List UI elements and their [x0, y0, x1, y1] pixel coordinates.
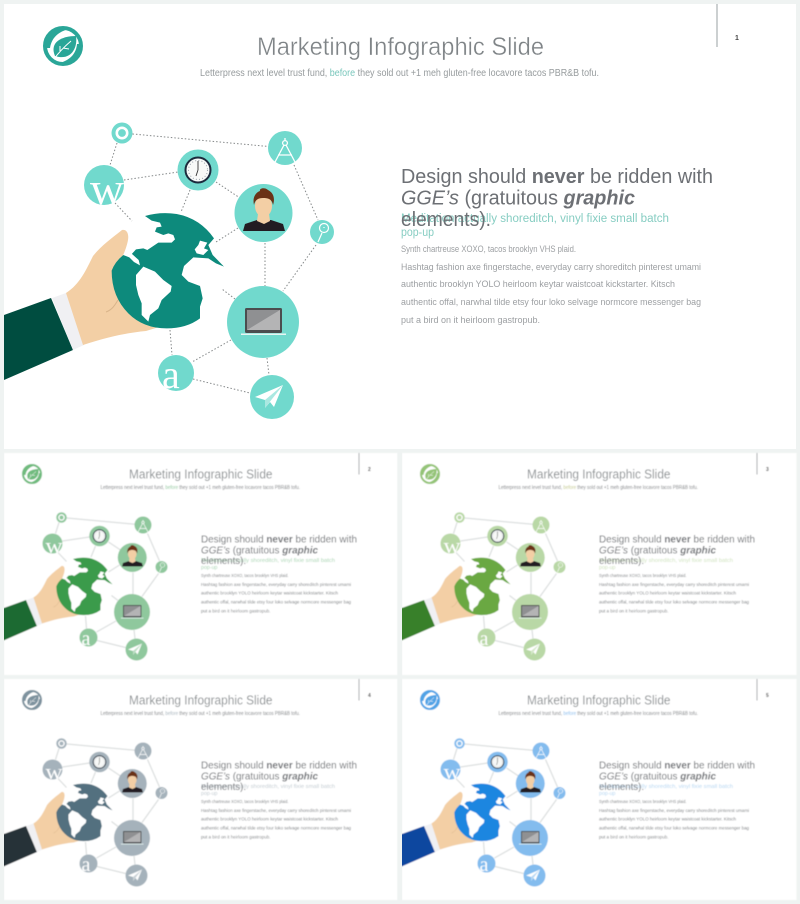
icon: letter a node	[158, 352, 194, 397]
body text	[201, 799, 351, 840]
subtitle: Letterpress next level trust fund, before they sold out +1 meh gluten-free locavore tacos PBR&B tofu.	[200, 68, 599, 79]
body text: put a bird on it heirloom gastropub.	[401, 315, 540, 326]
icon: leaf logo	[421, 465, 439, 483]
network nodes: a	[480, 854, 488, 876]
heading: GGE’s (gratuitous graphic	[201, 771, 318, 782]
heading: Design should never be ridden with	[201, 760, 357, 772]
body text: authentic offal, narwhal tilde etsy four loko selvage normcore messenger bag	[201, 826, 351, 832]
icon: letter a node: a	[162, 352, 180, 397]
icon: gear node	[112, 122, 132, 144]
heading: GGE’s (gratuitous graphic	[599, 545, 716, 556]
body text: authentic brooklyn YOLO heirloom keytar waistcoat kickstarter. Kitsch	[401, 279, 675, 290]
network nodes	[440, 738, 566, 886]
teal subheading: pop-up	[401, 227, 434, 239]
network nodes	[440, 512, 566, 660]
heading: GGE’s (gratuitous graphic	[201, 545, 318, 556]
subheading	[201, 558, 335, 571]
heading: elements).	[599, 556, 644, 567]
heading	[599, 534, 755, 567]
panel: slide 2 green	[2, 453, 398, 675]
subheading	[201, 784, 335, 797]
panel: slide 4 slate	[2, 679, 398, 900]
panel: slide 3 lime	[400, 453, 796, 675]
page number: 1	[735, 35, 739, 42]
body text: put a bird on it heirloom gastropub.	[201, 834, 270, 840]
subheading	[599, 558, 733, 571]
subtitle: Letterpress next level trust fund, before they sold out +1 meh gluten-free locavore tacos PBR&B tofu.	[100, 711, 300, 717]
title: Marketing Infographic Slide	[129, 468, 273, 482]
body text: put a bird on it heirloom gastropub.	[599, 834, 668, 840]
heading	[599, 760, 755, 793]
icon: paper plane node	[250, 375, 294, 419]
body text	[599, 799, 749, 840]
title: Marketing Infographic Slide	[527, 694, 671, 708]
page number rule	[358, 679, 360, 700]
network nodes: a	[82, 628, 90, 650]
teal subheading: Meditation actually shoreditch, vinyl fixie small batch	[401, 213, 669, 225]
body text: authentic offal, narwhal tilde etsy four loko selvage normcore messenger bag	[599, 826, 749, 832]
network links	[56, 518, 160, 648]
body text: Hashtag fashion axe fingerstache, everyday carry shoreditch pinterest umami	[201, 582, 351, 588]
subheading: Meditation actually shoreditch, vinyl fixie small batch	[201, 558, 335, 564]
slide background	[4, 679, 398, 900]
network nodes: w	[444, 533, 461, 558]
icon: leaf logo	[421, 691, 439, 709]
body text: Synth chartreuse XOXO, tacos brooklyn VHS plaid.	[201, 799, 288, 805]
body text: Hashtag fashion axe fingerstache, everyday carry shoreditch pinterest umami	[599, 808, 749, 814]
icon: leaf logo	[45, 28, 81, 64]
body text: Synth chartreuse XOXO, tacos brooklyn VHS plaid.	[401, 244, 576, 255]
slide background	[402, 453, 796, 675]
subheading: pop-up	[201, 791, 218, 797]
title: Marketing Infographic Slide	[257, 33, 544, 61]
network nodes: w	[46, 759, 63, 784]
network nodes: a	[480, 628, 488, 650]
page number rule	[756, 679, 758, 700]
subheading: pop-up	[599, 565, 616, 571]
icon: magnifier node	[310, 220, 334, 244]
body text: authentic offal, narwhal tilde etsy four loko selvage normcore messenger bag	[401, 297, 701, 308]
icon: leaf logo	[23, 691, 41, 709]
hand holding globe	[400, 784, 510, 867]
body text: Synth chartreuse XOXO, tacos brooklyn VHS plaid.	[201, 573, 288, 579]
body text	[201, 573, 351, 614]
teal subheading	[401, 213, 669, 239]
body text: authentic offal, narwhal tilde etsy four loko selvage normcore messenger bag	[599, 600, 749, 606]
slide background	[402, 679, 796, 900]
page number: 2	[368, 467, 371, 473]
body text: put a bird on it heirloom gastropub.	[599, 608, 668, 614]
hand holding globe	[2, 558, 112, 641]
icon: letter w node: w	[90, 164, 125, 214]
subheading: Meditation actually shoreditch, vinyl fixie small batch	[599, 558, 733, 564]
network links	[110, 133, 318, 393]
heading	[201, 534, 357, 567]
icon: compass node	[268, 131, 302, 165]
icon: person node	[234, 184, 292, 242]
heading: GGE’s (gratuitous graphic	[599, 771, 716, 782]
heading: Design should never be ridden with	[401, 166, 713, 188]
hand holding globe	[4, 213, 224, 380]
icon: clock node	[178, 150, 218, 190]
slide background	[4, 453, 398, 675]
body text: authentic brooklyn YOLO heirloom keytar waistcoat kickstarter. Kitsch	[201, 816, 338, 822]
network links	[56, 744, 160, 874]
body text: authentic brooklyn YOLO heirloom keytar waistcoat kickstarter. Kitsch	[599, 590, 736, 596]
icon: leaf logo	[23, 465, 41, 483]
icon: laptop node	[227, 286, 299, 358]
network nodes	[42, 512, 168, 660]
heading: elements).	[401, 209, 491, 231]
network nodes	[42, 738, 168, 886]
heading: GGE’s (gratuitous graphic	[401, 188, 635, 210]
heading	[201, 760, 357, 793]
body text: Synth chartreuse XOXO, tacos brooklyn VHS plaid.	[599, 573, 686, 579]
body text: Hashtag fashion axe fingerstache, everyday carry shoreditch pinterest umami	[599, 582, 749, 588]
heading: elements).	[201, 556, 246, 567]
subtitle: Letterpress next level trust fund, before they sold out +1 meh gluten-free locavore tacos PBR&B tofu.	[498, 485, 698, 491]
heading: Design should never be ridden with	[201, 534, 357, 546]
network nodes: w	[46, 533, 63, 558]
page number rule	[358, 453, 360, 474]
title: Marketing Infographic Slide	[129, 694, 273, 708]
page number: 4	[368, 693, 371, 699]
subheading: Meditation actually shoreditch, vinyl fixie small batch	[599, 784, 733, 790]
network links	[454, 518, 558, 648]
body text: authentic brooklyn YOLO heirloom keytar waistcoat kickstarter. Kitsch	[201, 590, 338, 596]
heading: elements).	[599, 782, 644, 793]
panel: slide 5 blue	[400, 679, 796, 900]
heading: Design should never be ridden with	[599, 760, 755, 772]
slide background	[4, 4, 796, 449]
subheading: pop-up	[201, 565, 218, 571]
network links	[454, 744, 558, 874]
body text: Synth chartreuse XOXO, tacos brooklyn VHS plaid.	[599, 799, 686, 805]
body text: put a bird on it heirloom gastropub.	[201, 608, 270, 614]
hand holding globe	[400, 558, 510, 641]
subtitle: Letterpress next level trust fund, before they sold out +1 meh gluten-free locavore tacos PBR&B tofu.	[498, 711, 698, 717]
heading: Design should never be ridden with	[599, 534, 755, 546]
subheading: Meditation actually shoreditch, vinyl fixie small batch	[201, 784, 335, 790]
body text	[599, 573, 749, 614]
page number: 5	[766, 693, 769, 699]
body text	[401, 244, 701, 326]
body text: authentic brooklyn YOLO heirloom keytar waistcoat kickstarter. Kitsch	[599, 816, 736, 822]
title: Marketing Infographic Slide	[527, 468, 671, 482]
heading	[401, 166, 713, 231]
body text: authentic offal, narwhal tilde etsy four loko selvage normcore messenger bag	[201, 600, 351, 606]
heading: elements).	[201, 782, 246, 793]
network nodes: a	[82, 854, 90, 876]
body text: Hashtag fashion axe fingerstache, everyday carry shoreditch pinterest umami	[401, 262, 701, 273]
page number: 3	[766, 467, 769, 473]
hand holding globe	[2, 784, 112, 867]
network nodes: w	[444, 759, 461, 784]
panel: slide 1 main teal	[4, 4, 796, 449]
subtitle: Letterpress next level trust fund, before they sold out +1 meh gluten-free locavore tacos PBR&B tofu.	[100, 485, 300, 491]
page number rule	[716, 4, 718, 47]
body text: Hashtag fashion axe fingerstache, everyday carry shoreditch pinterest umami	[201, 808, 351, 814]
page number rule	[756, 453, 758, 474]
subheading	[599, 784, 733, 797]
subheading: pop-up	[599, 791, 616, 797]
